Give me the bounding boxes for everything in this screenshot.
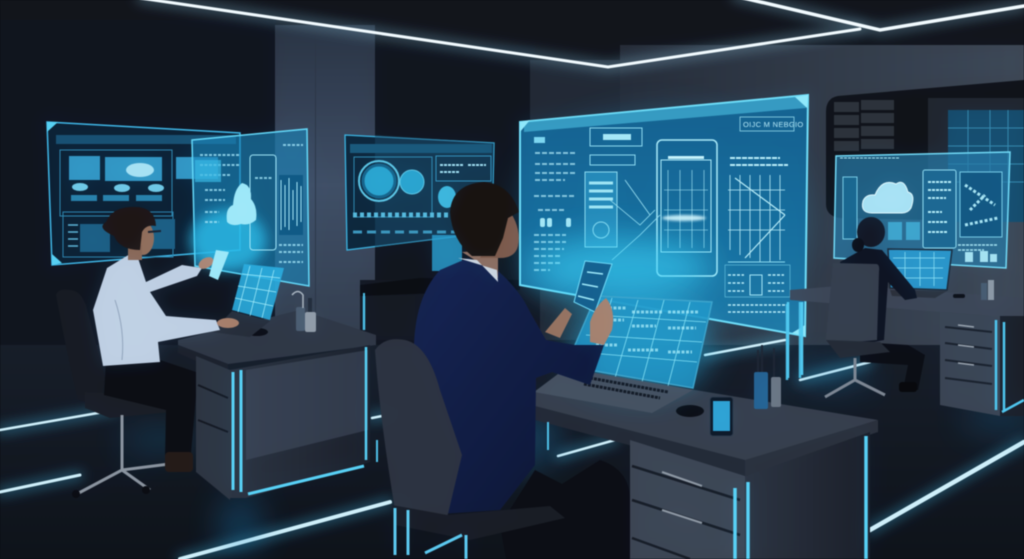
mouse (676, 405, 704, 417)
left column rows (534, 153, 575, 270)
right desk (788, 280, 1024, 416)
shirt (93, 254, 220, 366)
icon: cloud (862, 182, 913, 213)
centre device frame (657, 140, 717, 276)
centre desk (535, 345, 878, 559)
chair (56, 290, 105, 405)
centre desk back section (360, 278, 520, 336)
hologram: centre dial panel (345, 135, 494, 271)
right laptop (888, 249, 952, 298)
phone (209, 250, 229, 280)
icon: cloud (227, 183, 256, 225)
right chart (728, 175, 785, 262)
person: left woman with chair (56, 207, 239, 498)
ceiling light strips (140, 0, 1024, 67)
chair (826, 263, 879, 344)
centre laptop (534, 296, 712, 413)
hologram: left cloud panel (190, 129, 309, 286)
wall monitor right (826, 80, 1024, 222)
left desk (178, 292, 377, 500)
cups and bottles (292, 292, 316, 332)
smartphone (710, 397, 733, 436)
hologram: left dashboard (47, 122, 240, 265)
panel title text: OIJC M NEBGIO (743, 120, 804, 129)
bottles (754, 372, 768, 409)
head (132, 221, 154, 255)
chair (375, 339, 462, 518)
floor glow (120, 363, 1024, 555)
network lines (610, 180, 660, 260)
legs (500, 460, 630, 559)
hands (197, 255, 215, 271)
phone (574, 261, 612, 312)
hologram: main large panel (510, 95, 810, 336)
floor light strips (0, 340, 1024, 559)
collar and neck (462, 250, 498, 278)
person: centre man with chair (375, 182, 630, 559)
hands (545, 308, 572, 338)
legs (104, 360, 196, 465)
person: right seated woman with chair (825, 217, 925, 397)
left laptop (212, 264, 284, 337)
head (480, 205, 519, 258)
hologram: right cloud panel (834, 152, 1010, 268)
hologram glare over main panel lower edge (787, 302, 800, 380)
suit (414, 258, 604, 514)
